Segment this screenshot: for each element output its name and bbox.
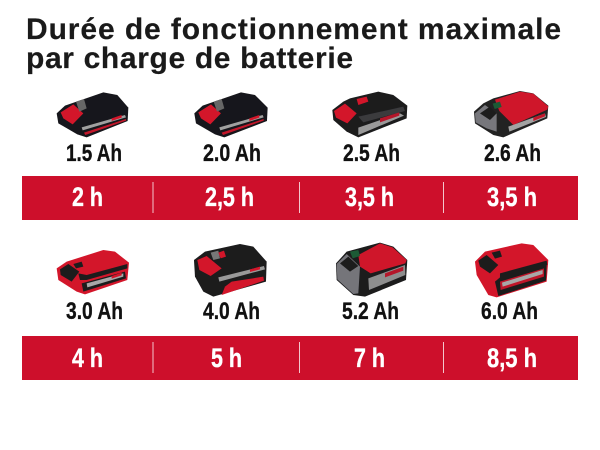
panel: runtime bar row 1: 3,5 h (345, 182, 394, 212)
icon: battery 1.5 Ah (57, 92, 128, 137)
panel: runtime bar row 2: 4 h (72, 343, 103, 373)
panel: runtime bar row 2: 5 h (211, 343, 242, 373)
title (26, 13, 561, 75)
labels: capacity row 2: 5.2 Ah (342, 298, 399, 325)
panel: runtime bar row 1: 2,5 h (205, 182, 254, 212)
labels: capacity row 1: 2.6 Ah (484, 140, 541, 167)
icon: battery 4.0 Ah (194, 244, 267, 297)
title: Durée de fonctionnement maximale (26, 13, 561, 46)
icon: battery 6.0 Ah (475, 243, 548, 297)
panel: runtime bar row 1: 3,5 h (487, 182, 537, 212)
icon: battery 2.5 Ah (332, 92, 407, 137)
labels: capacity row 1 (66, 140, 541, 167)
panel: runtime bar row 1: 2 h (72, 182, 103, 212)
panel: runtime bar row 2 (22, 336, 578, 380)
icon: battery 2.0 Ah (194, 92, 268, 137)
panel: runtime bar row 2: 7 h (354, 343, 385, 373)
panel: runtime bar row 2: 8,5 h (487, 343, 537, 373)
labels: capacity row 2: 4.0 Ah (203, 298, 260, 325)
icon: battery 3.0 Ah (57, 250, 129, 294)
labels: capacity row 1: 1.5 Ah (66, 140, 122, 167)
labels: capacity row 1: 2.0 Ah (203, 140, 261, 167)
labels: capacity row 2 (66, 298, 538, 325)
panel: runtime bar row 1 (22, 176, 578, 220)
labels: capacity row 2: 3.0 Ah (66, 298, 123, 325)
labels: capacity row 1: 2.5 Ah (343, 140, 400, 167)
icon: battery 2.6 Ah (474, 91, 548, 137)
labels: capacity row 2: 6.0 Ah (481, 298, 538, 325)
icon: battery 5.2 Ah (336, 243, 407, 297)
title: par charge de batterie (26, 42, 353, 75)
